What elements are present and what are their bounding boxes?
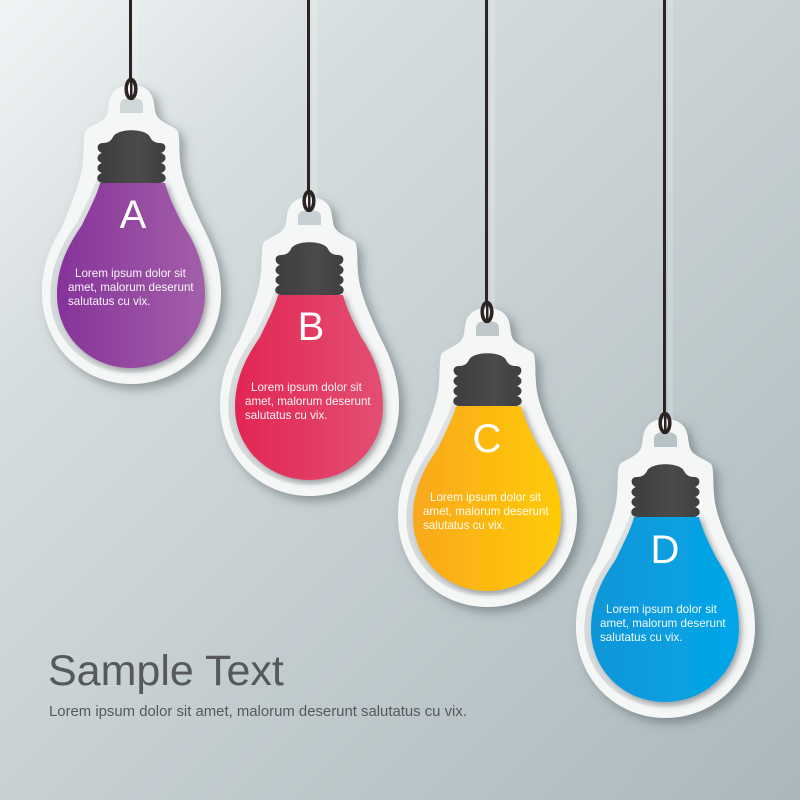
text B: amet, malorum deserunt [245, 395, 371, 408]
text D: Lorem ipsum dolor sit [606, 603, 718, 616]
tag B [220, 197, 399, 496]
letter B: B [298, 305, 324, 349]
text B: Lorem ipsum dolor sit [251, 381, 363, 394]
text C: amet, malorum deserunt [423, 505, 549, 518]
color fill B [235, 295, 383, 480]
text B: salutatus cu vix. [245, 409, 327, 422]
bulb B [220, 0, 399, 496]
color fill A [57, 183, 205, 368]
cord D [660, 0, 670, 433]
cord shadow B [312, 0, 317, 200]
socket A [97, 130, 166, 183]
title: Sample Text [48, 647, 284, 695]
text D: salutatus cu vix. [600, 631, 682, 644]
bulb C [398, 0, 577, 607]
socket D [631, 464, 700, 517]
tag C [398, 308, 577, 607]
cord C [482, 0, 492, 322]
letter C: C [473, 417, 501, 461]
text D: amet, malorum deserunt [600, 617, 726, 630]
text C: salutatus cu vix. [423, 519, 505, 532]
cord shadow D [668, 0, 673, 422]
inner ring C [406, 400, 568, 596]
text C: Lorem ipsum dolor sit [430, 491, 542, 504]
inner ring A [50, 177, 212, 373]
text A: Lorem ipsum dolor sit [75, 267, 187, 280]
inner ring D [584, 511, 746, 707]
text A: salutatus cu vix. [68, 295, 150, 308]
bulb D [576, 0, 755, 718]
text A: amet, malorum deserunt [68, 281, 194, 294]
subtitle: Lorem ipsum dolor sit amet, malorum deserunt salutatus cu vix. [49, 704, 467, 720]
cord A [126, 0, 136, 99]
cord shadow A [134, 0, 139, 88]
socket B [275, 242, 344, 295]
cord shadow C [490, 0, 495, 311]
color fill D [591, 517, 739, 702]
cord B [304, 0, 314, 211]
letter D: D [651, 528, 679, 572]
tag A [42, 85, 221, 384]
color fill C [413, 406, 561, 591]
letter A: A [120, 193, 147, 237]
tag D [576, 419, 755, 718]
socket C [453, 353, 522, 406]
bulb A [42, 0, 221, 384]
inner ring B [228, 289, 390, 485]
